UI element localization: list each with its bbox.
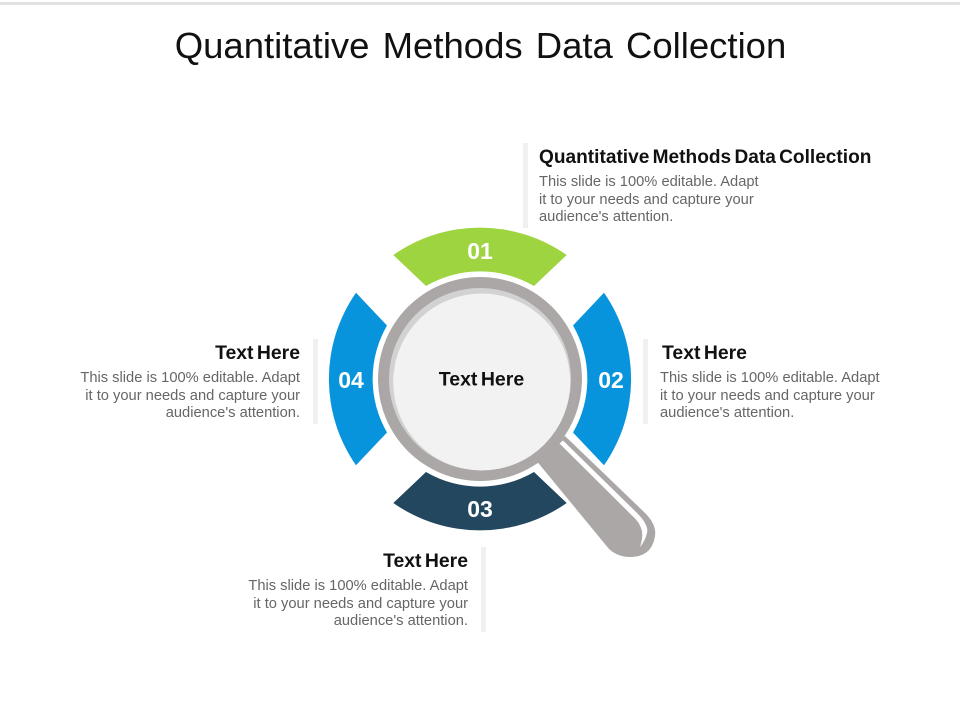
text block 03: audience's attention. bbox=[334, 613, 468, 629]
text block 04: This slide is 100% editable. Adapt bbox=[80, 370, 300, 386]
segment 04: 04 bbox=[338, 367, 364, 393]
text block 02: Text Here bbox=[662, 342, 747, 364]
segment 03: 03 bbox=[467, 496, 493, 522]
segment 02: 02 bbox=[598, 367, 624, 393]
text block 02: audience's attention. bbox=[660, 405, 794, 421]
segment 04 bbox=[329, 293, 387, 465]
text block 04 bbox=[80, 339, 318, 424]
magnifier lens bbox=[378, 277, 582, 481]
text block 01: Quantitative Methods Data Collection bbox=[539, 147, 871, 168]
text block 03: Text Here bbox=[383, 550, 468, 572]
magnifier handle bbox=[535, 436, 655, 557]
text block 03 bbox=[248, 547, 486, 632]
text block 04: audience's attention. bbox=[166, 405, 300, 421]
segment 01 bbox=[393, 228, 567, 286]
title: Quantitative Methods Data Collection bbox=[175, 25, 786, 66]
segment 01: 01 bbox=[467, 238, 493, 264]
text block 01 bbox=[523, 143, 871, 228]
magnifier lens: Text Here bbox=[439, 368, 524, 390]
segment 03 bbox=[393, 472, 567, 530]
text block 01: This slide is 100% editable. Adapt bbox=[539, 174, 759, 190]
text block 03: it to your needs and capture your bbox=[253, 596, 468, 612]
text block 01: it to your needs and capture your bbox=[539, 192, 754, 208]
text block 03: This slide is 100% editable. Adapt bbox=[248, 578, 468, 594]
text block 04: Text Here bbox=[215, 342, 300, 364]
text block 02: This slide is 100% editable. Adapt bbox=[660, 370, 880, 386]
text block 02: it to your needs and capture your bbox=[660, 388, 875, 404]
text block 04: it to your needs and capture your bbox=[85, 388, 300, 404]
text block 02 bbox=[643, 339, 880, 424]
text block 01: audience's attention. bbox=[539, 209, 673, 225]
segment 02 bbox=[573, 293, 631, 465]
